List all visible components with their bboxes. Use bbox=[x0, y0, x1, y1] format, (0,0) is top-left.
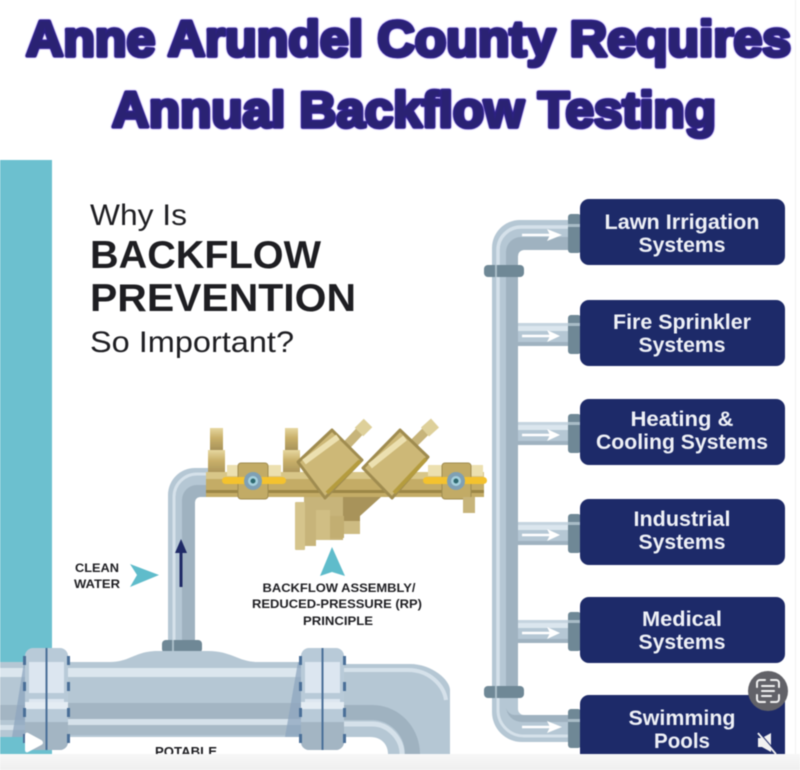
box: lawn irrigation systems: Systems bbox=[638, 234, 726, 257]
title bbox=[26, 11, 791, 138]
box: industrial systems bbox=[580, 499, 785, 565]
clean water label bbox=[74, 563, 121, 591]
lower relief housing bbox=[295, 497, 381, 550]
test cocks bbox=[208, 428, 300, 474]
box: fire sprinkler systems: Systems bbox=[638, 334, 726, 357]
box: heating and cooling systems bbox=[580, 399, 785, 465]
box: lawn irrigation systems: Lawn Irrigation bbox=[604, 211, 760, 234]
box: heating and cooling systems: Cooling Systems bbox=[596, 431, 768, 454]
pipe left stub bbox=[0, 662, 30, 737]
box: industrial systems: Systems bbox=[638, 531, 726, 554]
left ball valve bbox=[222, 463, 286, 499]
potable label: POTABLE bbox=[155, 745, 217, 759]
icon: muted speaker bbox=[758, 732, 777, 754]
clean water label: WATER bbox=[74, 579, 121, 591]
main pipe section bbox=[66, 651, 302, 737]
flange shadows bbox=[12, 662, 30, 737]
title: Anne Arundel County Requires bbox=[26, 11, 791, 67]
right check valve housing bbox=[363, 423, 435, 498]
box: medical systems bbox=[580, 597, 785, 663]
backflow assembly label: REDUCED-PRESSURE (RP) bbox=[252, 597, 422, 611]
box: swimming pools bbox=[580, 695, 785, 754]
backflow assembly label: BACKFLOW ASSEMBLY/ bbox=[262, 581, 416, 595]
backflow assembly valve bbox=[206, 423, 487, 550]
heading: why is backflow prevention so important: PREVENTION bbox=[90, 277, 356, 320]
heading: why is backflow prevention so important: Why Is bbox=[90, 199, 187, 232]
icon: scan button bbox=[748, 671, 788, 711]
heading: why is backflow prevention so important: So Important? bbox=[90, 326, 294, 359]
clean water label: CLEAN bbox=[75, 563, 119, 575]
backflow assembly label bbox=[252, 581, 422, 628]
box: swimming pools: Pools bbox=[654, 730, 710, 753]
box: industrial systems: Industrial bbox=[634, 508, 730, 531]
heading: why is backflow prevention so important: BACKFLOW bbox=[90, 234, 321, 277]
box: lawn irrigation systems bbox=[580, 199, 785, 265]
riser pipe with flow arrow bbox=[162, 468, 210, 653]
box: fire sprinkler systems bbox=[580, 300, 785, 366]
left check valve housing bbox=[298, 423, 368, 498]
backflow assembly label: PRINCIPLE bbox=[303, 614, 373, 628]
box: heating and cooling systems: Heating & bbox=[630, 408, 734, 431]
box: medical systems: Medical bbox=[642, 608, 722, 631]
main brass body bbox=[206, 472, 484, 497]
icon: play button bbox=[26, 734, 42, 751]
teal side band bbox=[0, 160, 52, 754]
heading: why is backflow prevention so important bbox=[90, 199, 356, 359]
box: swimming pools: Swimming bbox=[628, 707, 736, 730]
pipe elbow bbox=[344, 664, 450, 754]
title: Annual Backflow Testing bbox=[112, 82, 716, 138]
box: medical systems: Systems bbox=[638, 631, 726, 654]
right ball valve bbox=[423, 463, 487, 513]
box: fire sprinkler systems: Fire Sprinkler bbox=[613, 311, 751, 334]
right main pipe with branches bbox=[484, 214, 581, 748]
icon: assembly pointer arrow bbox=[320, 547, 345, 576]
footer strip covers cropped content bbox=[0, 754, 800, 770]
potable water main pipe bbox=[0, 648, 450, 754]
icon: clean water arrow bbox=[130, 564, 159, 587]
